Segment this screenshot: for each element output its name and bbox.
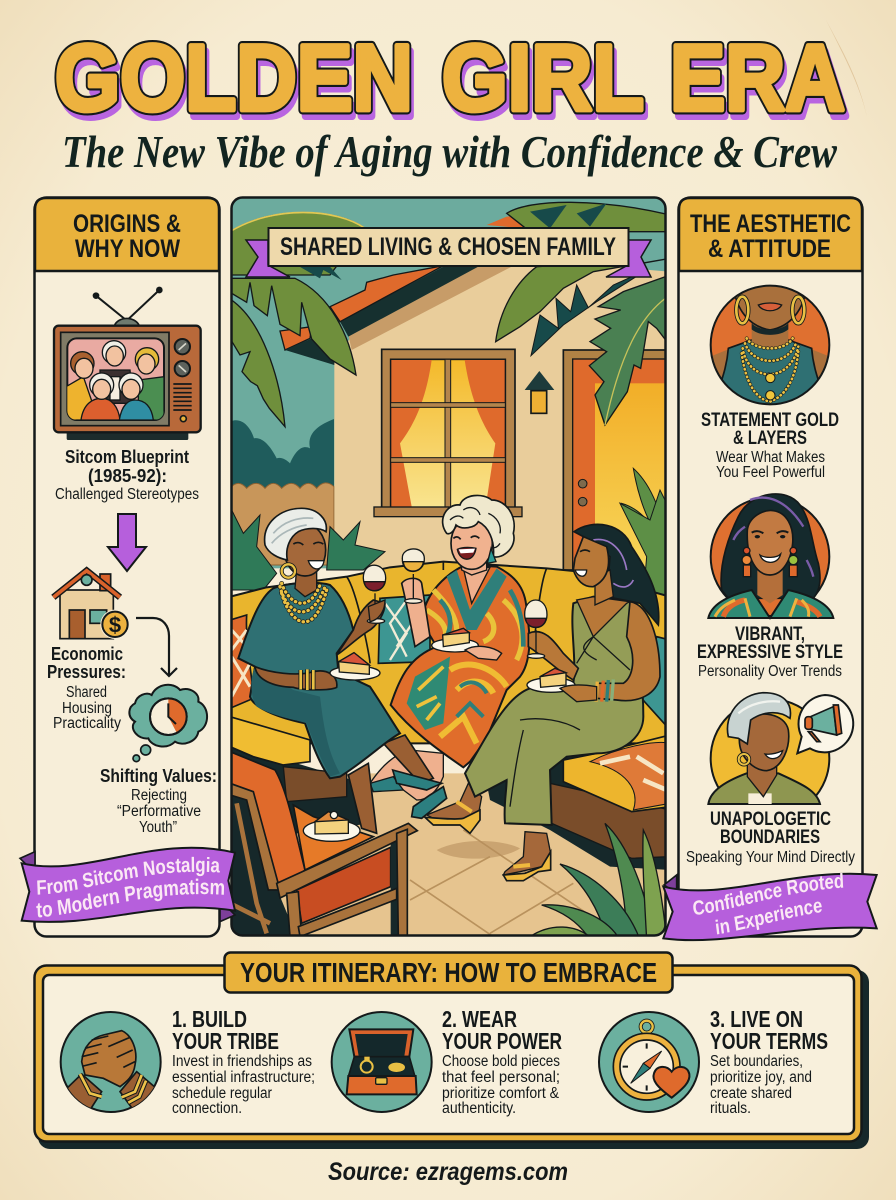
text: wear your power: YOUR POWER [442, 1028, 562, 1054]
panel header: aesthetic [679, 198, 862, 271]
armchair [232, 796, 289, 934]
ribbon: confidence rooted in experience: in Experience [715, 902, 822, 934]
panel header: origins: ORIGINS & [73, 210, 181, 238]
text: shifting values: Youth” [139, 819, 177, 836]
heading: your itinerary [224, 952, 672, 992]
text: sitcom blueprint: Challenged Stereotypes [55, 486, 199, 503]
banner: shared living and chosen family: SHARED LIVING & CHOSEN FAMILY [280, 233, 616, 261]
text: wear your power: Choose bold pieces [442, 1053, 560, 1070]
middle woman: wine glass [402, 549, 424, 603]
dark under sofa [232, 748, 360, 834]
text: shifting values [100, 766, 217, 836]
panel: central illustration [230, 195, 673, 940]
icon: unapologetic boundaries portrait with megaphone [708, 693, 853, 818]
text: statement gold: & LAYERS [733, 428, 807, 449]
text: live on your terms: rituals. [710, 1100, 751, 1117]
icon: jewelry box [332, 1012, 432, 1112]
ribbon: from sitcom nostalgia to modern pragmatism [18, 846, 236, 923]
text: statement gold: Wear What Makes [716, 449, 825, 466]
icon: compass and heart [599, 1012, 699, 1112]
plants behind sofa [230, 510, 385, 590]
panel: aesthetic and attitude [678, 198, 862, 936]
banner: shared living and chosen family [246, 228, 651, 277]
source line: Source: ezragems.com [328, 1158, 568, 1186]
title: GOLDEN [55, 25, 413, 130]
text: statement gold: You Feel Powerful [716, 464, 825, 481]
arrow: curved to clock [136, 618, 177, 676]
icon: vibrant style portrait [708, 494, 833, 618]
text: live on your terms: Set boundaries, [710, 1053, 803, 1070]
right woman: near shin and sandal [503, 832, 551, 875]
panel: origins and why now [34, 198, 220, 936]
panel header: origins [35, 198, 219, 271]
text: unapologetic boundaries: Speaking Your Mind Directly [686, 849, 855, 866]
right woman: head [574, 524, 659, 625]
text: sitcom blueprint [55, 447, 199, 503]
palm left [230, 212, 365, 275]
title: GIRL [442, 25, 644, 130]
text: wear your power: authenticity. [442, 1100, 516, 1117]
left woman: dress [238, 583, 400, 778]
sofa [230, 562, 670, 743]
palm right [507, 202, 670, 232]
icon: house with dollar coin: $ [109, 612, 121, 637]
text: wear your power: 2. WEAR [442, 1006, 517, 1032]
middle woman legs [370, 750, 443, 800]
heading: your itinerary: YOUR ITINERARY: HOW TO EMBRACE [240, 957, 657, 988]
text: unapologetic boundaries [686, 809, 855, 866]
text: live on your terms: create shared [710, 1085, 792, 1102]
scene frame [232, 198, 666, 936]
middle woman: cake [432, 628, 478, 652]
left woman: legs and shoes [348, 763, 377, 833]
lamp [525, 371, 554, 390]
text: economic pressures [47, 644, 126, 732]
ribbon: confidence rooted in experience [662, 872, 878, 942]
text: economic pressures: Practicality [53, 715, 121, 732]
text: build your tribe [172, 1006, 315, 1117]
title: GIRL [445, 31, 647, 136]
middle woman: head [402, 578, 430, 647]
title [55, 25, 848, 136]
text: build your tribe: essential infrastructure; [172, 1069, 315, 1086]
title: GOLDEN [58, 31, 416, 136]
title: GIRL [442, 25, 644, 130]
text: build your tribe: YOUR TRIBE [172, 1028, 279, 1054]
panel header: aesthetic: & ATTITUDE [708, 235, 831, 263]
foreground agave plant [530, 823, 667, 940]
floor [281, 773, 664, 934]
text: shifting values: Shifting Values: [100, 766, 217, 786]
scene: house exterior [230, 195, 673, 570]
text: build your tribe: Invest in friendships as [172, 1053, 312, 1070]
text: statement gold: STATEMENT GOLD [701, 410, 839, 431]
middle woman: caftan [391, 565, 529, 767]
text: sitcom blueprint: (1985-92): [88, 466, 167, 486]
icon: thought cloud with clock [129, 685, 207, 762]
right woman: arms [597, 602, 660, 701]
text: build your tribe: connection. [172, 1100, 242, 1117]
title: GOLDEN [55, 25, 413, 130]
text: live on your terms: prioritize joy, and [710, 1069, 812, 1086]
right woman: cake [527, 668, 575, 692]
text: build your tribe: 1. BUILD [172, 1006, 247, 1032]
icon: clasped hands [61, 1012, 161, 1112]
ribbon: from sitcom nostalgia to modern pragmatism: From Sitcom Nostalgia [37, 856, 220, 895]
window [382, 349, 515, 509]
icon: retro television [54, 287, 201, 440]
title: ERA [670, 25, 845, 130]
door [563, 350, 673, 570]
icon: house with dollar coin [53, 571, 130, 639]
text: wear your power: prioritize comfort & [442, 1085, 560, 1102]
left woman: necklaces [280, 583, 327, 622]
text: wear your power: that feel personal; [442, 1069, 560, 1086]
text: unapologetic boundaries: BOUNDARIES [720, 827, 820, 848]
panel header: aesthetic: THE AESTHETIC [690, 210, 851, 238]
text: live on your terms: YOUR TERMS [710, 1028, 828, 1054]
text: economic pressures: Economic [51, 644, 123, 664]
text: build your tribe: schedule regular [172, 1085, 272, 1102]
text: vibrant expressive style: Personality Over Trends [698, 663, 842, 680]
left woman: head [295, 568, 317, 597]
text: economic pressures: Shared [66, 684, 107, 701]
armchair cake [303, 811, 360, 841]
ribbon: confidence rooted in experience: Confidence Rooted [693, 872, 844, 915]
arrow: down [108, 514, 146, 571]
left woman: cake [330, 653, 380, 680]
text: sitcom blueprint: Sitcom Blueprint [65, 447, 189, 467]
icon: gold layered necklaces portrait [710, 283, 830, 407]
text: vibrant expressive style: VIBRANT, [735, 624, 805, 645]
title: ERA [673, 31, 848, 136]
text: live on your terms [710, 1006, 828, 1117]
text: live on your terms: 3. LIVE ON [710, 1006, 803, 1032]
text: economic pressures: Pressures: [47, 662, 126, 682]
text: wear your power [442, 1006, 562, 1117]
text: vibrant expressive style: EXPRESSIVE STYLE [697, 642, 843, 663]
title: ERA [670, 25, 845, 130]
right woman: wine glass [525, 600, 547, 658]
text: economic pressures: Housing [62, 700, 112, 717]
panel: your itinerary [34, 952, 869, 1149]
left woman: wine glass and hand [363, 565, 386, 623]
pillows [232, 614, 252, 708]
text: shifting values: Rejecting [131, 787, 187, 804]
ribbon: from sitcom nostalgia to modern pragmatism: to Modern Pragmatism [36, 878, 224, 918]
scene: three women on sofa [230, 490, 670, 940]
text: vibrant expressive style [697, 624, 843, 680]
left woman: arms [255, 667, 337, 690]
text: unapologetic boundaries: UNAPOLOGETIC [710, 809, 831, 830]
panel header: origins: WHY NOW [75, 235, 180, 263]
text: statement gold [701, 410, 839, 481]
right woman: far foot sandal [427, 783, 482, 820]
right woman: jumpsuit [465, 597, 643, 825]
text: shifting values: “Performative [117, 803, 201, 820]
